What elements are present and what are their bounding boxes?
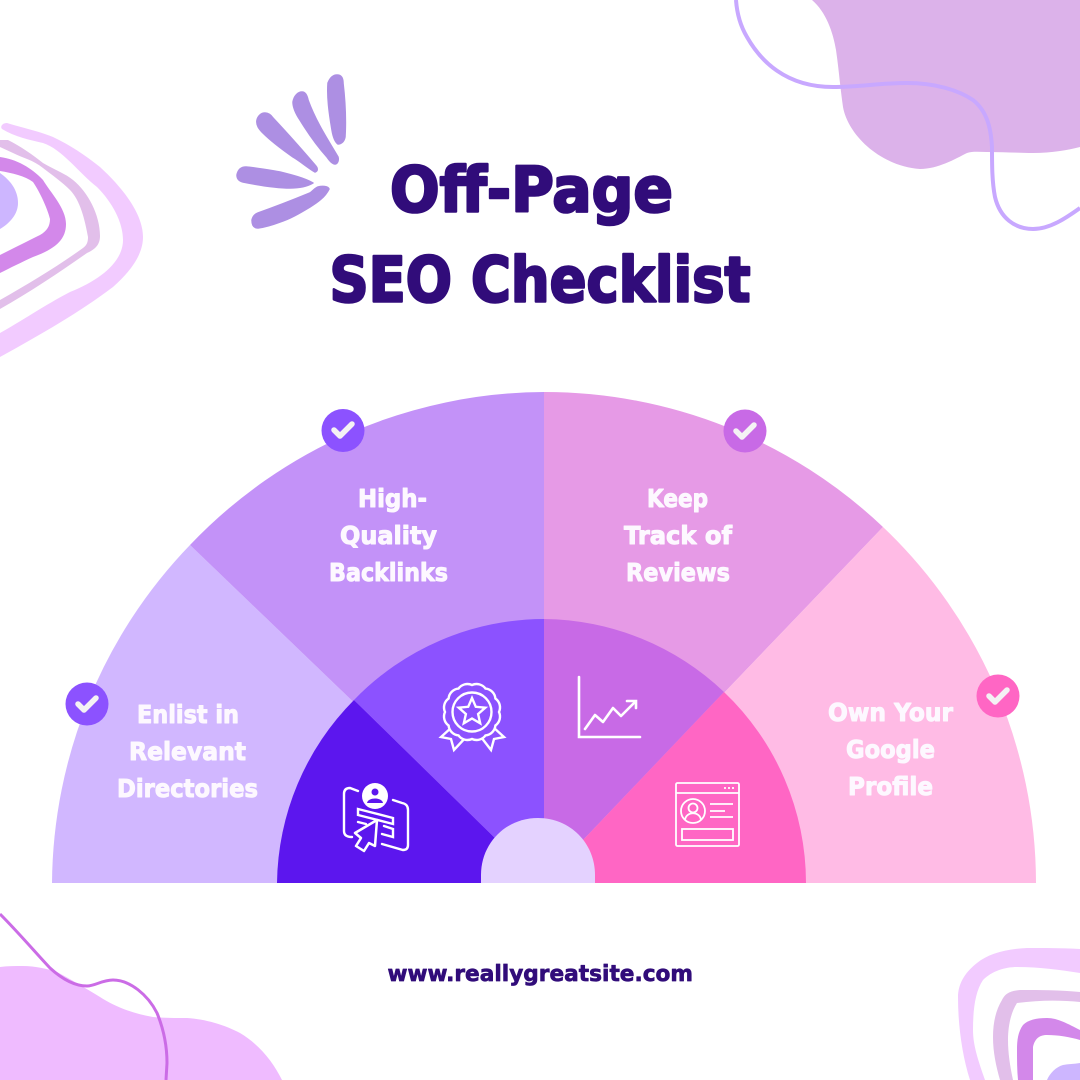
inner segment: violet xyxy=(354,619,544,883)
inner segment: pink xyxy=(538,692,806,883)
title line 2: SEO Checklist xyxy=(330,244,750,316)
label: Own Your Google Profile: Profile xyxy=(848,772,933,801)
label: Enlist in Relevant Directories xyxy=(117,700,258,803)
label: Enlist in Relevant Directories: Enlist in xyxy=(137,700,239,729)
label: Keep Track of Reviews: Reviews xyxy=(626,558,730,587)
decoration: burst strokes above title xyxy=(237,75,345,228)
check badge: left xyxy=(66,682,108,726)
label: Keep Track of Reviews: Keep xyxy=(647,484,708,513)
decoration: top right blob and line xyxy=(736,0,1080,229)
title line 1: Off-Page xyxy=(390,154,673,226)
decoration: left concentric rings xyxy=(0,123,143,357)
check badge: upper left xyxy=(322,409,364,452)
label: High-Quality Backlinks: High- xyxy=(358,484,427,513)
icon: person with cursor xyxy=(344,783,408,851)
website url: www.reallygreatsite.com xyxy=(388,961,693,987)
label: High-Quality Backlinks: Quality xyxy=(340,521,437,550)
inner segment: dark violet xyxy=(277,700,538,883)
label: Enlist in Relevant Directories: Relevant xyxy=(129,737,246,766)
segment: Keep Track of Reviews outer xyxy=(544,392,883,883)
semicircle chart xyxy=(52,392,1036,883)
decoration: bottom right concentric rings xyxy=(958,948,1080,1080)
label: Keep Track of Reviews: Track of xyxy=(624,521,732,550)
icon: line chart xyxy=(579,677,640,737)
label: Own Your Google Profile xyxy=(828,698,954,801)
icon: award badge xyxy=(441,684,504,750)
inner segment: orchid xyxy=(544,619,724,883)
check badge: upper right xyxy=(724,410,766,452)
label: Keep Track of Reviews xyxy=(624,484,732,587)
segment: Enlist in Relevant Directories outer xyxy=(52,545,538,883)
label: Own Your Google Profile: Own Your xyxy=(828,698,954,727)
title xyxy=(330,154,750,316)
icon: profile window xyxy=(676,783,739,846)
segment: Own Your Google Profile outer xyxy=(538,527,1036,883)
label: Own Your Google Profile: Google xyxy=(846,735,935,764)
decoration: bottom left blob and line xyxy=(0,914,282,1080)
check badge: right xyxy=(976,674,1020,718)
segment: High-Quality Backlinks outer xyxy=(190,392,544,883)
label: Enlist in Relevant Directories: Directories xyxy=(117,774,258,803)
center hub xyxy=(481,818,595,883)
label: High-Quality Backlinks: Backlinks xyxy=(329,558,448,587)
label: High-Quality Backlinks xyxy=(329,484,448,587)
